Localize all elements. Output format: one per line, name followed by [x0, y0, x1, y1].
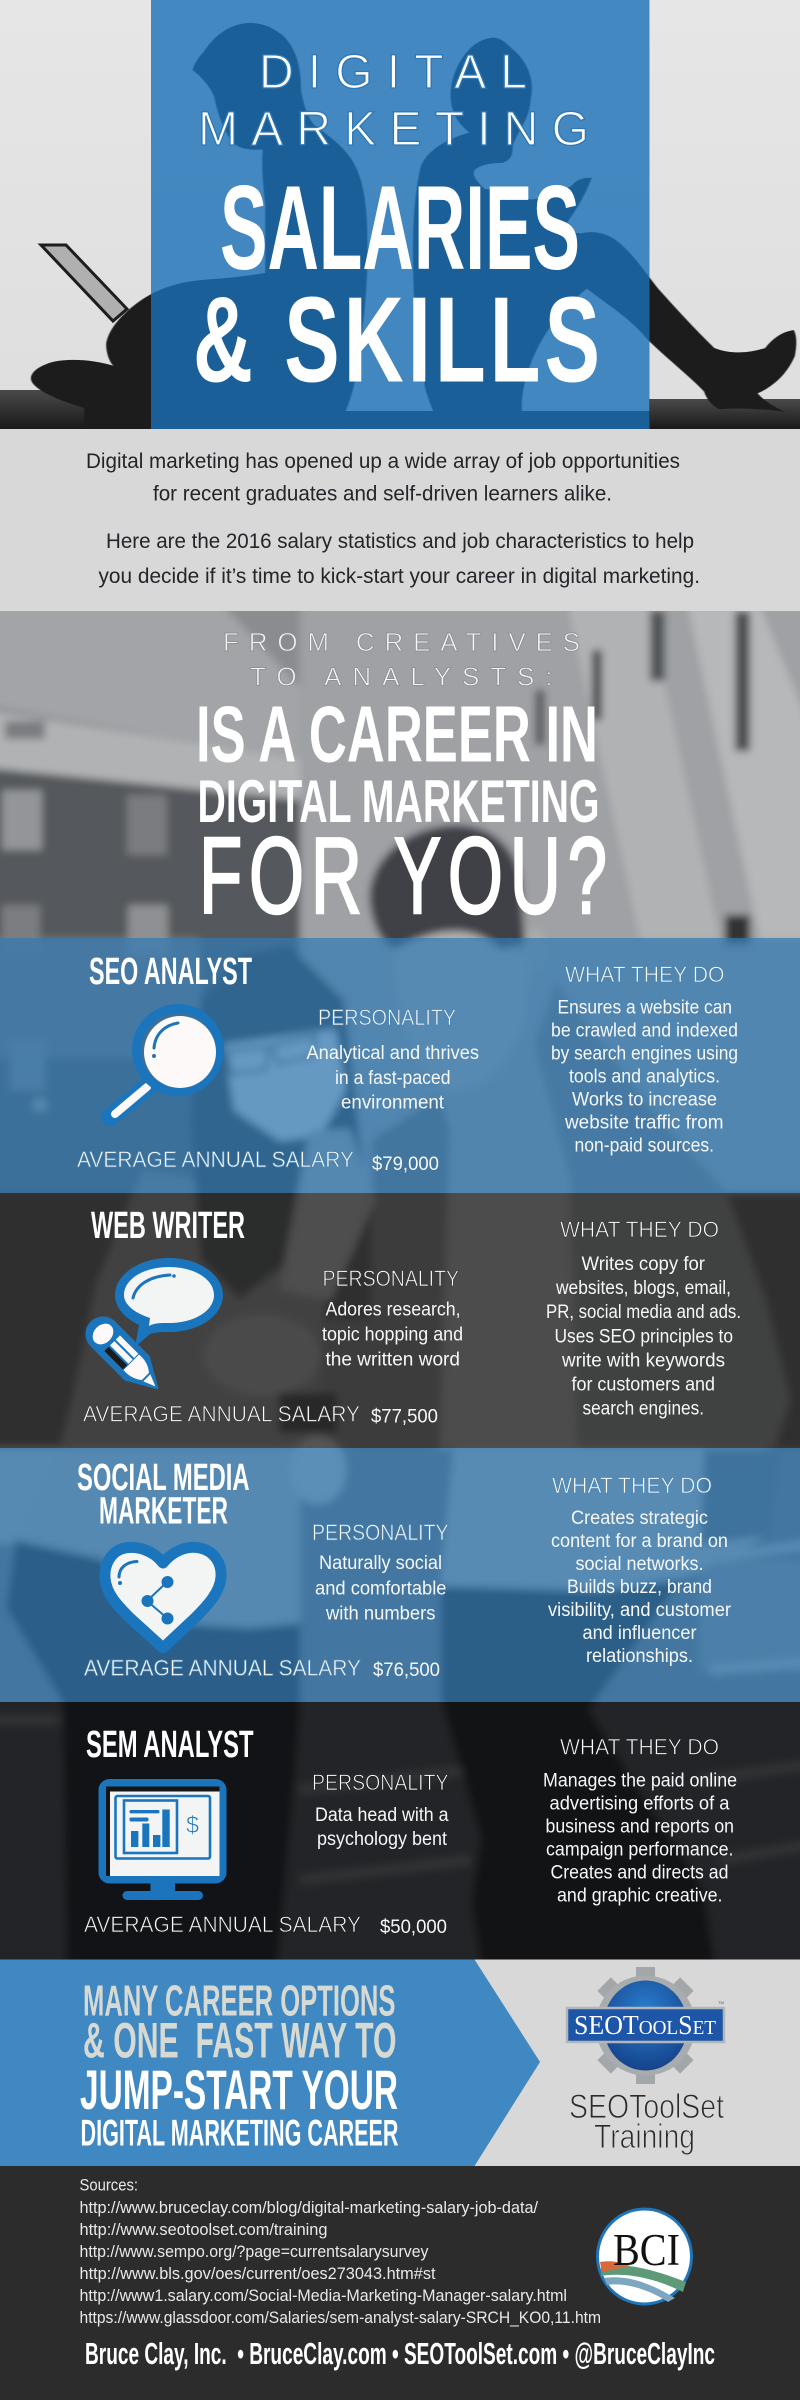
- title: salaries and skills: & SKILLS: [193, 273, 600, 408]
- sources list: http://www.bls.gov/oes/current/oes273043.htm#st: [80, 2264, 436, 2283]
- section heading: from creatives to analysts: FROM CREATIVES: [223, 627, 580, 657]
- salary: AVERAGE ANNUAL SALARY: [77, 1147, 354, 1172]
- what they do: WHAT THEY DO: [560, 1217, 719, 1242]
- what they do: tools and analytics.: [569, 1066, 720, 1088]
- call to action text: [80, 1976, 398, 2154]
- job title: SOCIAL MEDIA: [77, 1457, 250, 1499]
- personality: [322, 1266, 463, 1370]
- section heading: is a career in digital marketing for you: [196, 690, 607, 937]
- personality: Adores research,: [326, 1300, 460, 1320]
- what they do: WHAT THEY DO: [552, 1473, 712, 1498]
- blue title panel: [151, 0, 650, 429]
- what they do: and graphic creative.: [557, 1886, 722, 1906]
- what they do: business and reports on: [546, 1816, 734, 1838]
- sources list: Sources:: [80, 2176, 138, 2194]
- title: digital marketing: DIGITAL: [259, 46, 527, 99]
- band: sem analyst tint: [0, 1702, 800, 1960]
- personality: PERSONALITY: [312, 1520, 449, 1545]
- intro text: Digital marketing has opened up a wide array of job opportunities: [86, 449, 680, 473]
- intro text: [86, 449, 700, 588]
- personality: with numbers: [325, 1604, 436, 1624]
- what they do: PR, social media and ads.: [546, 1302, 741, 1323]
- icon: magnifying glass: [110, 1008, 220, 1117]
- intro text: Here are the 2016 salary statistics and job characteristics to help: [106, 529, 694, 553]
- panel: social media marketer: [77, 1457, 732, 1681]
- personality: psychology bent: [317, 1829, 448, 1850]
- personality: in a fast-paced: [335, 1068, 450, 1089]
- personality: [312, 1770, 449, 1850]
- personality: Data head with a: [315, 1805, 449, 1826]
- what they do: [548, 1473, 732, 1667]
- salary: AVERAGE ANNUAL SALARY: [83, 1402, 360, 1426]
- what they do: visibility, and customer: [548, 1600, 732, 1621]
- logo: bci: BCI: [613, 2225, 680, 2275]
- what they do: Ensures a website can: [558, 998, 732, 1018]
- call to action text: JUMP-START YOUR: [80, 2058, 398, 2121]
- personality: the written word: [326, 1350, 460, 1370]
- salary: AVERAGE ANNUAL SALARY: [84, 1912, 361, 1937]
- band: seo analyst tint: [0, 938, 800, 1193]
- sources list: http://www.seotoolset.com/training: [80, 2220, 328, 2239]
- personality: Analytical and thrives: [306, 1043, 479, 1064]
- section heading: from creatives to analysts: TO ANALYSTS:: [250, 662, 552, 692]
- job title: SEM ANALYST: [86, 1724, 254, 1766]
- what they do: advertising efforts of a: [550, 1794, 730, 1814]
- panel: web writer: [80, 1205, 741, 1428]
- section heading: is a career in digital marketing for you: DIGITAL MARKETING: [198, 768, 600, 835]
- icon: speech bubble and pencil: [80, 1258, 223, 1399]
- logo caption: seotoolset training: [569, 2088, 724, 2156]
- personality: [306, 1005, 479, 1114]
- what they do: Works to increase: [572, 1090, 717, 1110]
- what they do: write with keywords: [561, 1350, 725, 1372]
- icon: heart with share symbol: [105, 1547, 221, 1648]
- man: [538, 992, 790, 1448]
- title: digital marketing: [198, 46, 589, 156]
- woman: [60, 1170, 330, 1450]
- sources list: http://www.sempo.org/?page=currentsalarysurvey: [80, 2242, 429, 2261]
- what they do: [543, 1734, 737, 1906]
- what they do: Creates strategic: [571, 1508, 708, 1529]
- band: social media tint: [0, 1448, 800, 1702]
- job title: SEO ANALYST: [89, 951, 252, 993]
- intro text: for recent graduates and self-driven learners alike.: [153, 482, 612, 506]
- what they do: Manages the paid online: [543, 1770, 737, 1792]
- what they do: [551, 962, 738, 1156]
- band: web writer tint: [0, 1193, 800, 1448]
- logo: seotoolset gear: [567, 1967, 724, 2084]
- title: digital marketing: MARKETING: [198, 103, 589, 156]
- logo: seotoolset gear: SEOTOOLSET: [574, 2010, 716, 2040]
- section heading: from creatives to analysts: [223, 627, 580, 692]
- what they do: by search engines using: [551, 1044, 738, 1064]
- what they do: content for a brand on: [551, 1531, 728, 1552]
- personality: [312, 1520, 449, 1624]
- icon: monitor with chart: [98, 1779, 226, 1900]
- personality: PERSONALITY: [322, 1266, 459, 1291]
- personality: PERSONALITY: [318, 1005, 456, 1030]
- what they do: campaign performance.: [546, 1840, 734, 1860]
- hero panel: [0, 0, 800, 429]
- what they do: for customers and: [572, 1374, 715, 1396]
- background photo: couple looking at a phone: [0, 570, 800, 2010]
- what they do: search engines.: [582, 1398, 704, 1420]
- what they do: website traffic from: [564, 1112, 724, 1134]
- personality: and comfortable: [315, 1578, 446, 1600]
- what they do: Builds buzz, brand: [567, 1577, 712, 1598]
- intro text: you decide if it’s time to kick-start your career in digital marketing.: [98, 564, 700, 588]
- panel: call to action: [0, 1960, 800, 2166]
- intro panel: [0, 429, 800, 611]
- what they do: WHAT THEY DO: [565, 962, 724, 987]
- sources list: https://www.glassdoor.com/Salaries/sem-analyst-salary-SRCH_KO0,11.htm: [80, 2308, 601, 2327]
- job title: [77, 1457, 250, 1532]
- salary: $79,000: [372, 1154, 439, 1175]
- personality: Naturally social: [319, 1553, 442, 1574]
- panel: sem analyst: [84, 1724, 737, 1938]
- personality: PERSONALITY: [312, 1770, 449, 1795]
- logo: bci: [598, 2209, 692, 2304]
- what they do: WHAT THEY DO: [560, 1734, 719, 1760]
- salary: $77,500: [371, 1406, 438, 1428]
- icon: monitor with chart: $: [186, 1812, 199, 1839]
- what they do: Writes copy for: [582, 1254, 706, 1275]
- salary: $76,500: [373, 1660, 440, 1681]
- job title: WEB WRITER: [91, 1205, 245, 1247]
- personality: topic hopping and: [322, 1324, 463, 1346]
- what they do: non-paid sources.: [574, 1136, 714, 1156]
- logo caption: seotoolset training: Training: [594, 2118, 695, 2156]
- what they do: Uses SEO principles to: [554, 1326, 733, 1348]
- sources list: http://www1.salary.com/Social-Media-Marketing-Manager-salary.html: [80, 2286, 567, 2305]
- logo caption: seotoolset training: SEOToolSet: [569, 2088, 724, 2126]
- what they do: Creates and directs ad: [550, 1862, 728, 1884]
- personality: environment: [341, 1092, 445, 1114]
- call to action text: DIGITAL MARKETING CAREER: [80, 2112, 398, 2154]
- salary: $50,000: [380, 1917, 447, 1938]
- what they do: [546, 1217, 741, 1420]
- call to action text: & ONE FAST WAY TO: [83, 2012, 396, 2068]
- call to action text: MANY CAREER OPTIONS: [83, 1976, 396, 2026]
- hero photo: silhouettes back to back: [0, 0, 800, 429]
- panel: footer: [0, 2166, 800, 2400]
- what they do: be crawled and indexed: [551, 1020, 738, 1042]
- salary: AVERAGE ANNUAL SALARY: [84, 1656, 361, 1680]
- logo: seotoolset gear: TM: [718, 2000, 724, 2005]
- sources list: http://www.bruceclay.com/blog/digital-marketing-salary-job-data/: [80, 2198, 538, 2217]
- section heading: is a career in digital marketing for you: IS A CAREER IN: [196, 690, 598, 778]
- what they do: social networks.: [576, 1554, 704, 1575]
- what they do: websites, blogs, email,: [555, 1278, 731, 1299]
- sources list: [80, 2176, 601, 2327]
- what they do: and influencer: [582, 1623, 697, 1644]
- panel: seo analyst: [77, 951, 738, 1175]
- arrow: [0, 1960, 540, 2166]
- what they do: relationships.: [586, 1646, 693, 1667]
- rails: [0, 1540, 800, 1880]
- title: salaries and skills: [193, 161, 600, 408]
- job title: MARKETER: [99, 1490, 228, 1532]
- section heading: is a career in digital marketing for you: FOR YOU?: [199, 816, 607, 937]
